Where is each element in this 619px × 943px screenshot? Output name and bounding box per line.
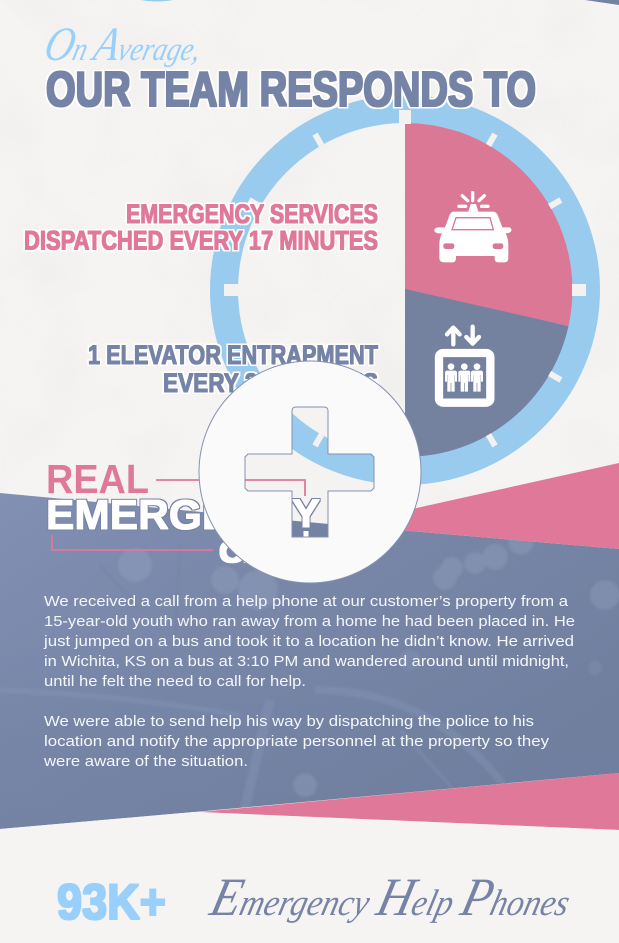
donut chart [224, 109, 586, 471]
cross window [244, 406, 374, 538]
story text: until he felt the need to call for help. [44, 674, 306, 690]
icon: elevator [439, 327, 490, 403]
story text: We received a call from a help phone at our customer’s property from a [44, 594, 569, 610]
label: elevator entrapment: 1 ELEVATOR ENTRAPMENT [88, 340, 378, 370]
wedge: emergency services [405, 123, 572, 326]
cross window: Y [292, 492, 320, 536]
heading: real emergency call: REAL [46, 456, 149, 502]
stat: 93k+: 93K+ [57, 874, 166, 930]
label: emergency services [24, 199, 378, 256]
pink wedge: lower right [200, 773, 619, 830]
icon: police car [434, 193, 511, 262]
stat label: emergency help phones: Emergency Help Phones [204, 867, 578, 927]
magnifier circle with cross [198, 360, 422, 584]
top edge fragments [135, 0, 619, 5]
label: emergency services: DISPATCHED EVERY 17 MINUTES [24, 226, 378, 256]
story text: location and notify the appropriate personnel at the property so they [44, 734, 550, 750]
wedge: elevator entrapment [405, 289, 568, 457]
heading: real emergency call: CALL [219, 536, 311, 569]
heading: real emergency call: EMERGENCY [46, 491, 320, 538]
photo texture and bokeh [120, 540, 619, 807]
ring [224, 109, 586, 471]
heading: real emergency call [46, 456, 320, 569]
story text [43, 594, 575, 770]
heading: on average: On Average, [39, 18, 209, 71]
label: elevator entrapment: EVERY 24 MINUTES [163, 368, 378, 398]
pink wedge: upper right [340, 463, 619, 549]
story text: in Wichita, KS on a bus at 3:10 PM and wandered around until midnight, [44, 654, 569, 670]
story text: just jumped on a bus and took it to a location he didn’t know. He arrived [43, 634, 574, 650]
story text: 15-year-old youth who ran away from a home he had been placed in. He [44, 614, 575, 630]
label: emergency services: EMERGENCY SERVICES [126, 199, 378, 229]
white base below band [0, 812, 619, 943]
label: elevator entrapment [88, 340, 378, 398]
story text: were aware of the situation. [43, 754, 248, 770]
ring ticks [224, 110, 586, 447]
story text: We were able to send help his way by dispatching the police to his [44, 714, 534, 730]
blue photo band [0, 493, 619, 830]
